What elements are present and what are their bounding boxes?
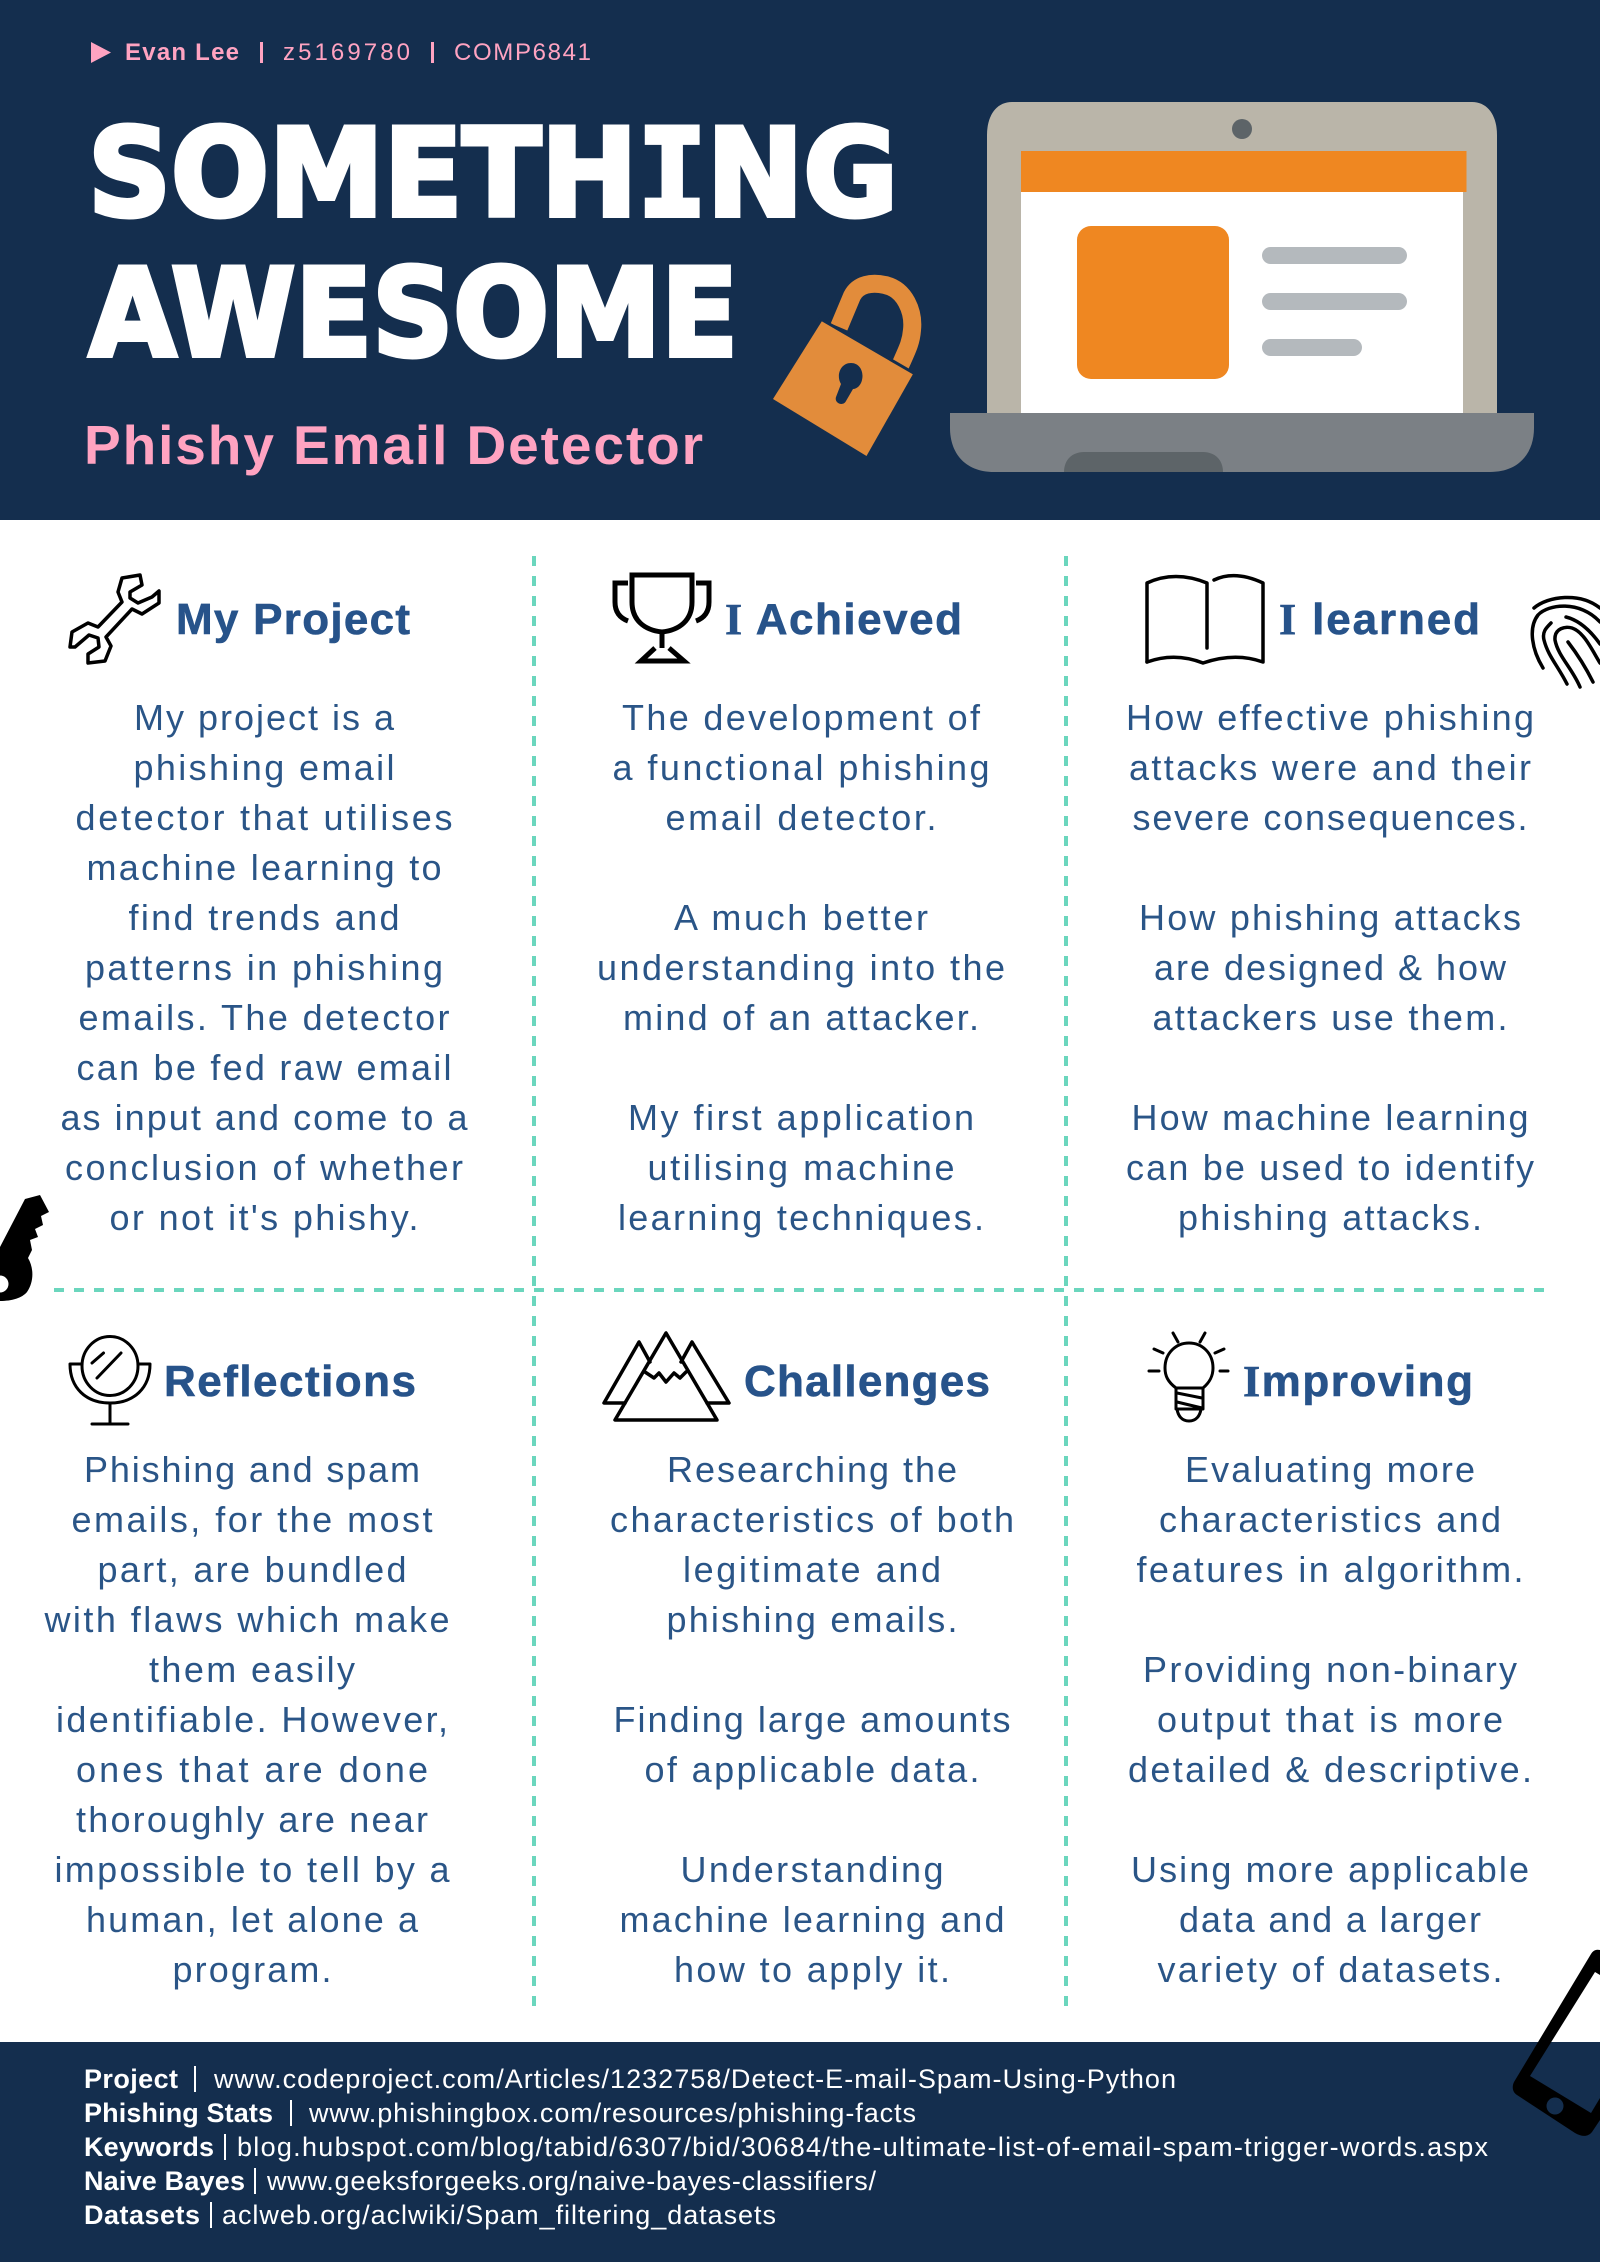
text block: I Achieved: utilising machine xyxy=(648,1147,954,1188)
author line xyxy=(91,39,591,66)
heading: My Project: My Project xyxy=(176,595,410,644)
panel: I learned xyxy=(1126,576,1534,1238)
panel: Challenges xyxy=(604,1333,1014,1990)
footer references: Naive Bayes xyxy=(84,2166,245,2196)
icon: fingerprint xyxy=(1532,597,1600,687)
text block: Improving: Providing non-binary xyxy=(1143,1649,1517,1690)
text block: My Project: phishing email xyxy=(134,747,394,788)
subtitle: Phishy Email Detector xyxy=(84,414,703,476)
text block: Improving: characteristics and xyxy=(1159,1499,1501,1540)
footer references xyxy=(84,2064,1489,2230)
text block: Challenges: how to apply it. xyxy=(674,1949,950,1990)
text block: I Achieved: email detector. xyxy=(666,797,936,838)
icon: mountains xyxy=(604,1333,729,1420)
text block: I learned: attacks were and their xyxy=(1129,747,1531,788)
panel: Reflections xyxy=(44,1336,450,1990)
text block: Reflections: ones that are done xyxy=(76,1749,428,1790)
text block: Improving: Using more applicable xyxy=(1131,1849,1529,1890)
icon: laptop xyxy=(950,102,1534,472)
text block: Improving: detailed & descriptive. xyxy=(1128,1749,1532,1790)
text block: My Project: detector that utilises xyxy=(76,797,452,838)
text block: Challenges: Understanding xyxy=(680,1849,944,1890)
text block: Reflections: thoroughly are near xyxy=(76,1799,428,1840)
text block: My Project: find trends and xyxy=(128,897,400,938)
text block: I learned: can be used to identify xyxy=(1126,1147,1534,1188)
text block: I Achieved: A much better xyxy=(674,897,928,938)
author line: COMP6841 xyxy=(454,39,591,66)
text block: Improving: data and a larger xyxy=(1179,1899,1481,1940)
footer references: Project xyxy=(84,2064,178,2094)
text block: I learned: are designed & how xyxy=(1154,947,1507,988)
heading: Improving: Improving xyxy=(1243,1357,1473,1406)
text block: Improving xyxy=(1128,1449,1532,1990)
heading: Reflections: Reflections xyxy=(164,1357,416,1406)
footer band xyxy=(0,2042,1600,2262)
text block: I learned: phishing attacks. xyxy=(1178,1197,1482,1238)
panel: Improving xyxy=(1128,1333,1532,1990)
heading: Challenges: Challenges xyxy=(744,1357,990,1406)
text block: Reflections: emails, for the most xyxy=(72,1499,432,1540)
icon: open book xyxy=(1147,576,1263,663)
text block: My Project: My project is a xyxy=(134,697,395,738)
text block: Challenges: machine learning and xyxy=(620,1899,1004,1940)
text block: I Achieved: mind of an attacker. xyxy=(623,997,979,1038)
text block: I learned: severe consequences. xyxy=(1132,797,1528,838)
text block: Reflections: human, let alone a xyxy=(86,1899,419,1940)
text block: I Achieved: My first application xyxy=(628,1097,974,1138)
text block: Improving: output that is more xyxy=(1157,1699,1503,1740)
text block: Reflections: part, are bundled xyxy=(98,1549,406,1590)
text block: My Project: as input and come to a xyxy=(60,1097,468,1138)
footer references: aclweb.org/aclwiki/Spam_filtering_datasets xyxy=(222,2200,776,2230)
header banner xyxy=(0,0,1600,520)
footer references: Datasets xyxy=(84,2200,200,2230)
text block: My Project xyxy=(60,697,468,1238)
icon: mirror xyxy=(70,1336,150,1424)
text block: Challenges: Finding large amounts xyxy=(614,1699,1010,1740)
title: AWESOME xyxy=(89,244,738,384)
footer references: www.codeproject.com/Articles/1232758/Detect-E-mail-Spam-Using-Python xyxy=(213,2064,1176,2094)
text block: My Project: emails. The detector xyxy=(78,997,450,1038)
icon: wrench xyxy=(70,575,159,663)
text block: I learned: How phishing attacks xyxy=(1139,897,1521,938)
text block: Challenges: characteristics of both xyxy=(610,1499,1014,1540)
footer references: Phishing Stats xyxy=(84,2098,273,2128)
text block: Challenges xyxy=(610,1449,1014,1990)
text block: Reflections: impossible to tell by a xyxy=(54,1849,450,1890)
text block: I learned xyxy=(1126,697,1534,1238)
footer references: Keywords xyxy=(84,2132,214,2162)
text block: Reflections: with flaws which make xyxy=(44,1599,450,1640)
icon: smartphone xyxy=(1513,1950,1600,2136)
text block: Reflections: them easily xyxy=(149,1649,355,1690)
panel: My Project xyxy=(60,575,468,1238)
text block: My Project: conclusion of whether xyxy=(65,1147,463,1188)
title: SOMETHING xyxy=(88,104,898,244)
text block: I learned: How effective phishing xyxy=(1126,697,1534,738)
text block: My Project: or not it's phishy. xyxy=(110,1197,418,1238)
text block: Reflections xyxy=(44,1449,450,1990)
text block: I Achieved: learning techniques. xyxy=(618,1197,984,1238)
text block: Improving: Evaluating more xyxy=(1185,1449,1475,1490)
footer references: blog.hubspot.com/blog/tabid/6307/bid/30684/the-ultimate-list-of-email-spam-trigger-words.aspx xyxy=(237,2132,1489,2162)
panel: I Achieved xyxy=(597,575,1005,1238)
text block: My Project: can be fed raw email xyxy=(76,1047,452,1088)
text block: Challenges: of applicable data. xyxy=(644,1749,980,1790)
footer references: www.phishingbox.com/resources/phishing-facts xyxy=(308,2098,916,2128)
text block: I learned: How machine learning xyxy=(1132,1097,1528,1138)
title xyxy=(88,104,898,384)
text block: My Project: machine learning to xyxy=(86,847,442,888)
author line: z5169780 xyxy=(283,39,410,66)
text block: Reflections: identifiable. However, xyxy=(56,1699,448,1740)
text block: I Achieved: The development of xyxy=(622,697,981,738)
icon: light bulb xyxy=(1149,1333,1228,1421)
text block: I Achieved xyxy=(597,697,1005,1238)
text block: Improving: features in algorithm. xyxy=(1136,1549,1524,1590)
heading: I learned: I learned xyxy=(1279,595,1480,644)
author line: Evan Lee xyxy=(125,39,239,66)
heading: I Achieved: I Achieved xyxy=(725,595,962,644)
text block: My Project: patterns in phishing xyxy=(85,947,443,988)
text block: I learned: attackers use them. xyxy=(1152,997,1508,1038)
text block: Challenges: phishing emails. xyxy=(666,1599,958,1640)
text block: Improving: variety of datasets. xyxy=(1158,1949,1502,1990)
text block: I Achieved: understanding into the xyxy=(597,947,1005,988)
text block: I Achieved: a functional phishing xyxy=(612,747,990,788)
text block: Reflections: program. xyxy=(172,1949,332,1990)
text block: Challenges: Researching the xyxy=(667,1449,957,1490)
footer references: www.geeksforgeeks.org/naive-bayes-classifiers/ xyxy=(266,2166,876,2196)
icon: padlock xyxy=(773,284,917,456)
text block: Reflections: Phishing and spam xyxy=(84,1449,420,1490)
icon: key xyxy=(0,1195,49,1301)
dashed grid dividers xyxy=(54,556,1545,2006)
text block: Challenges: legitimate and xyxy=(683,1549,941,1590)
icon: trophy xyxy=(615,575,709,661)
